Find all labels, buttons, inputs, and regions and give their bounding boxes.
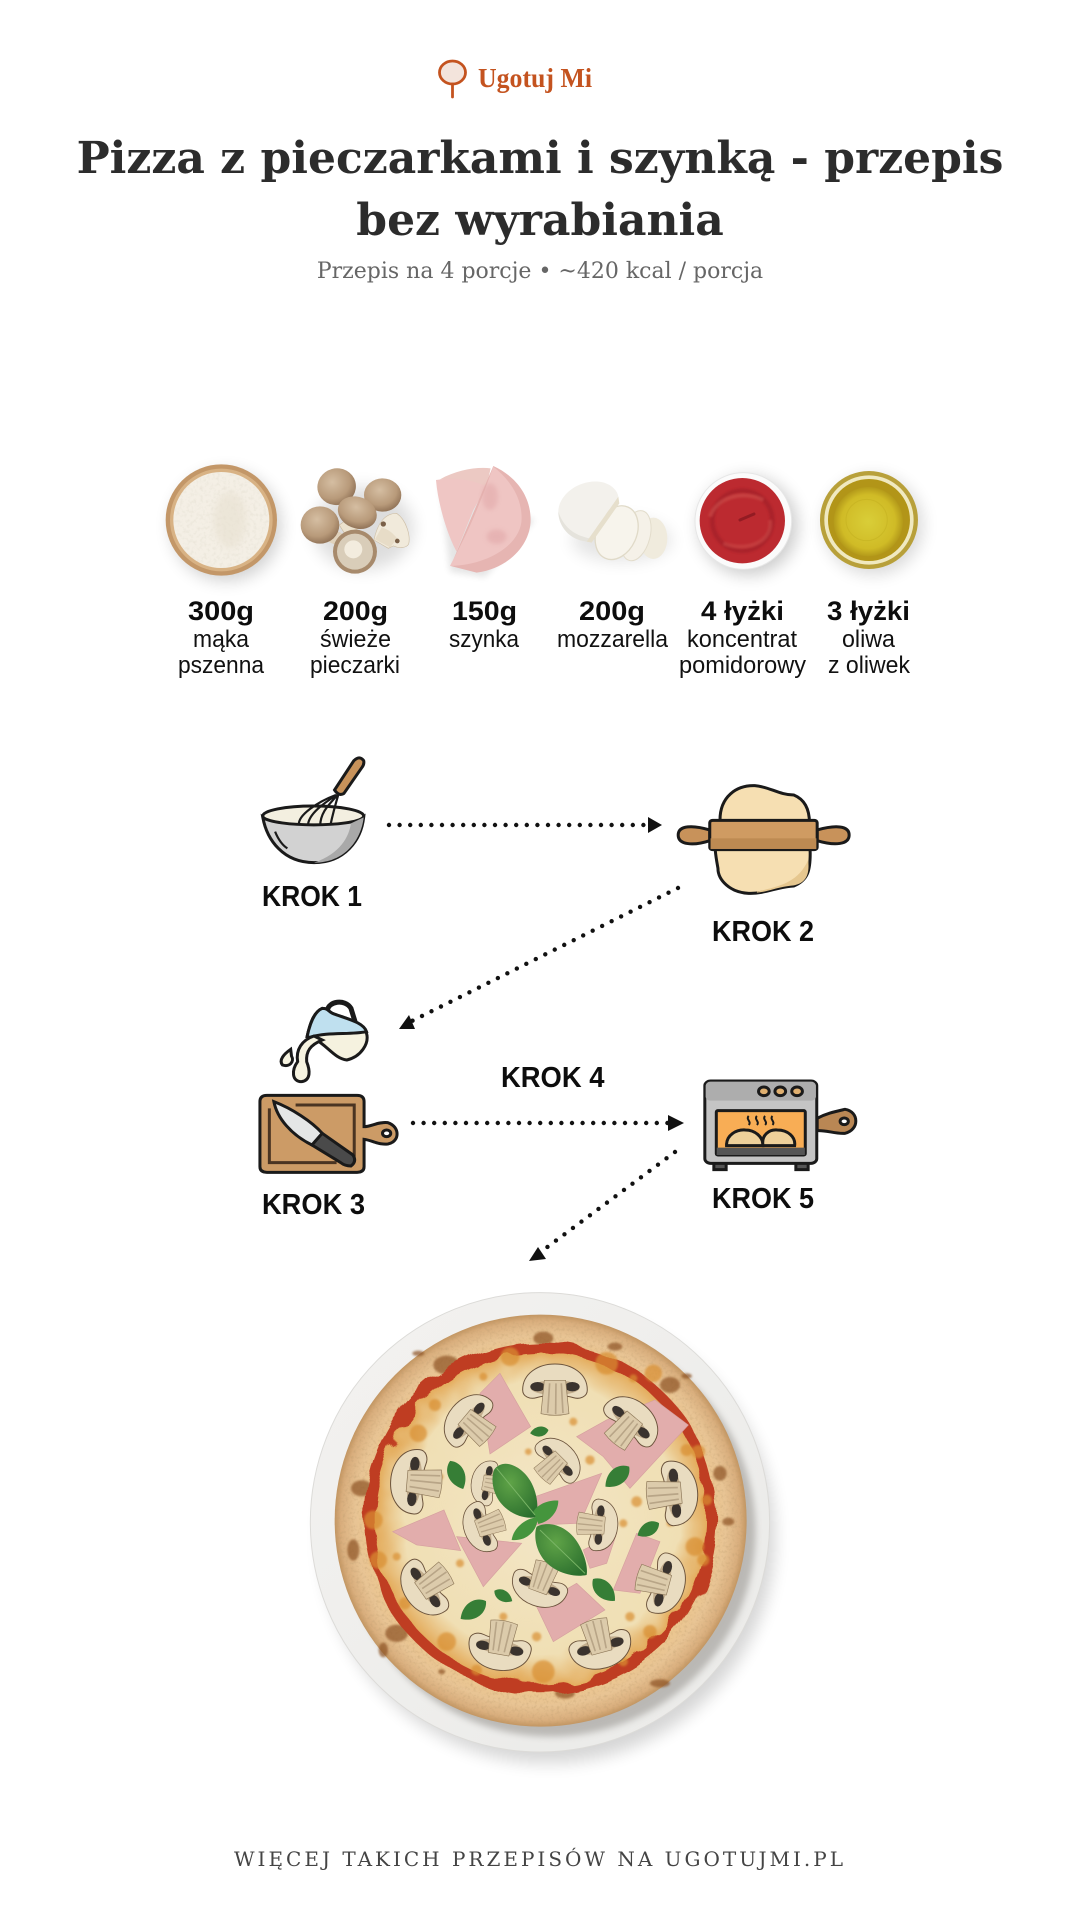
ham pieces (393, 1373, 688, 1642)
ingredient: mushrooms (301, 464, 413, 679)
icon: rolling pin and dough (678, 786, 849, 893)
logo: Ugotuj Mi (440, 61, 592, 97)
ingredient: olive oil: z oliwek (828, 652, 911, 679)
ingredient: tomato paste: koncentrat (687, 626, 797, 653)
ingredient: mozzarella: 200g (579, 596, 645, 626)
icon: ham slices (436, 466, 535, 577)
arrow: step 3 to 5 (413, 1115, 684, 1131)
icon: oven (705, 1081, 856, 1170)
ingredient: mushrooms: 200g (323, 596, 388, 626)
ingredient: ham: 150g (452, 596, 517, 626)
mushrooms (388, 1364, 700, 1676)
icon: pizza peel (440, 61, 466, 97)
ingredient: tomato paste: 4 łyżki (701, 596, 784, 626)
melted cheese spots (364, 1347, 712, 1683)
ingredient: ham: szynka (449, 626, 520, 653)
small herb leaves (443, 1425, 662, 1626)
basil (492, 1464, 587, 1576)
crust (335, 1315, 747, 1727)
icon: flour bowl (166, 464, 281, 581)
icon: bowl and whisk (263, 758, 364, 863)
sauce (365, 1342, 717, 1694)
ingredient: mozzarella (557, 482, 672, 653)
title: Pizza z pieczarkami i szynką - przepis (77, 133, 1003, 184)
icon: tomato paste bowl (695, 473, 798, 575)
step 2: KROK 2 (712, 916, 814, 948)
step 1 (262, 758, 364, 913)
arrow: step 5 to pizza (529, 1152, 675, 1261)
step 5 (705, 1081, 856, 1215)
icon: cutting board and knife (260, 1095, 397, 1172)
ingredient: mushrooms: pieczarki (310, 652, 400, 679)
cheese (375, 1352, 707, 1684)
ingredient: olive oil: oliwa (842, 626, 896, 653)
arrow: step 1 to 2 (389, 817, 662, 833)
arrow: step 2 to 3 (399, 888, 678, 1029)
ingredient: tomato paste (679, 473, 806, 679)
footer: WIĘCEJ TAKICH PRZEPISÓW NA UGOTUJMI.PL (234, 1846, 846, 1871)
step 4 label: KROK 4 (501, 1062, 604, 1094)
ingredient: olive oil: 3 łyżki (827, 596, 910, 626)
pizza (335, 1315, 747, 1727)
step 3: KROK 3 (262, 1189, 365, 1221)
ingredient: mushrooms: świeże (320, 626, 391, 653)
subtitle: Przepis na 4 porcje • ~420 kcal / porcja (317, 259, 763, 284)
step 3 (260, 1002, 397, 1221)
step 5: KROK 5 (712, 1183, 814, 1215)
ingredient: ham (436, 466, 535, 653)
ingredient: mozzarella: mozzarella (557, 626, 669, 653)
ingredient: tomato paste: pomidorowy (679, 652, 806, 679)
ingredient: flour: mąka (193, 626, 250, 653)
ingredient: flour (166, 464, 281, 679)
panel: steps (260, 758, 856, 1261)
step 2 (678, 786, 849, 948)
title: bez wyrabiania (356, 195, 724, 246)
ingredient: flour: 300g (188, 596, 254, 626)
step 1: KROK 1 (262, 881, 362, 913)
icon: milk jug (281, 1002, 367, 1082)
brand name: Ugotuj Mi (478, 63, 592, 93)
plate (310, 1293, 775, 1763)
pizza photo (310, 1293, 775, 1763)
ingredient: flour: pszenna (178, 652, 265, 679)
icon: mushrooms (301, 464, 413, 574)
icon: olive oil bowl (820, 471, 923, 574)
panel: ingredients (166, 464, 923, 679)
ingredient: olive oil (820, 471, 923, 679)
title (77, 133, 1003, 246)
icon: mozzarella (558, 482, 672, 566)
